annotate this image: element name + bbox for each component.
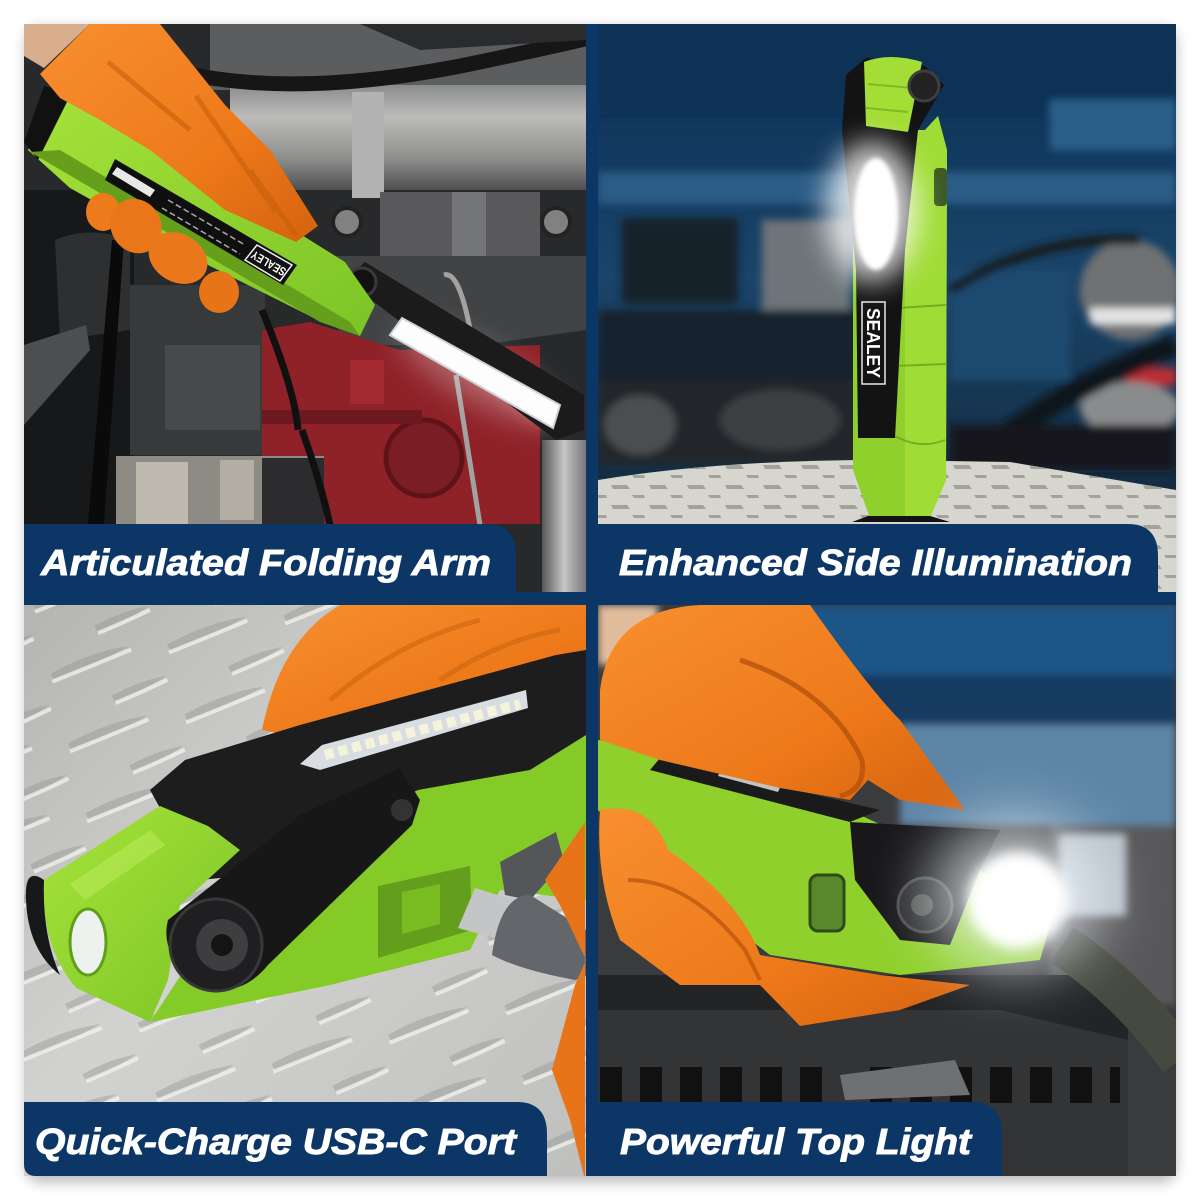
black label with SEALEY — [105, 159, 297, 285]
label: Enhanced Side Illumination — [598, 524, 1158, 592]
glove lower — [545, 822, 586, 1176]
arm — [345, 262, 584, 440]
orange glove top — [600, 605, 965, 810]
side lamp glow — [826, 142, 918, 282]
USB-C plug — [458, 888, 498, 938]
torch LED — [70, 909, 106, 975]
engine: upper surfaces — [210, 24, 586, 90]
USB-C cable — [492, 895, 586, 980]
tread plate — [598, 460, 1176, 592]
label: Quick-Charge USB-C Port — [24, 1102, 547, 1176]
black arm — [842, 58, 944, 438]
label: Enhanced Side Illumination: Enhanced Side Illumination — [619, 542, 1132, 583]
torch — [26, 650, 586, 1022]
panel: powerful top light photo — [598, 605, 1180, 1176]
orange glove behind — [262, 605, 586, 735]
label: Articulated Folding Arm: Articulated Folding Arm — [40, 542, 491, 583]
body — [28, 88, 375, 336]
label: Articulated Folding Arm — [24, 524, 516, 592]
blurred vehicle background — [598, 96, 1176, 474]
orange glove fingers — [86, 193, 120, 231]
engine: dark block left — [24, 190, 134, 530]
panel: enhanced side illumination photo — [598, 24, 1180, 592]
upright torch — [826, 57, 950, 522]
label: Quick-Charge USB-C Port: Quick-Charge USB-C Port — [35, 1121, 518, 1162]
engine: red block — [262, 322, 540, 524]
light beam glow — [391, 328, 550, 438]
hose — [1062, 945, 1180, 1060]
panel: articulated folding arm photo — [24, 24, 608, 592]
torch — [598, 740, 1060, 975]
green end cap — [44, 806, 240, 1022]
blurred background — [598, 605, 1176, 1005]
body — [853, 116, 947, 518]
green top cap — [864, 57, 922, 132]
engine: cable and dipstick — [262, 310, 330, 525]
black arm — [166, 792, 420, 988]
label: Powerful Top Light — [586, 1102, 1002, 1176]
engine: alternator — [116, 456, 324, 528]
metal bracket — [500, 832, 564, 900]
orange glove top — [40, 24, 318, 242]
black label with SEALEY: SEALEY — [249, 248, 288, 279]
top light glare — [930, 820, 1100, 970]
torch — [24, 24, 584, 440]
green body — [150, 735, 586, 1022]
black body and LED window — [150, 650, 586, 880]
battery base — [598, 975, 1128, 1040]
engine: vertical pipe — [542, 440, 586, 592]
orange glove lower — [599, 808, 970, 1026]
label: Powerful Top Light: Powerful Top Light — [620, 1121, 973, 1162]
SEALEY badge: SEALEY — [863, 308, 883, 378]
panel: quick-charge USB-C port photo — [24, 605, 586, 1176]
